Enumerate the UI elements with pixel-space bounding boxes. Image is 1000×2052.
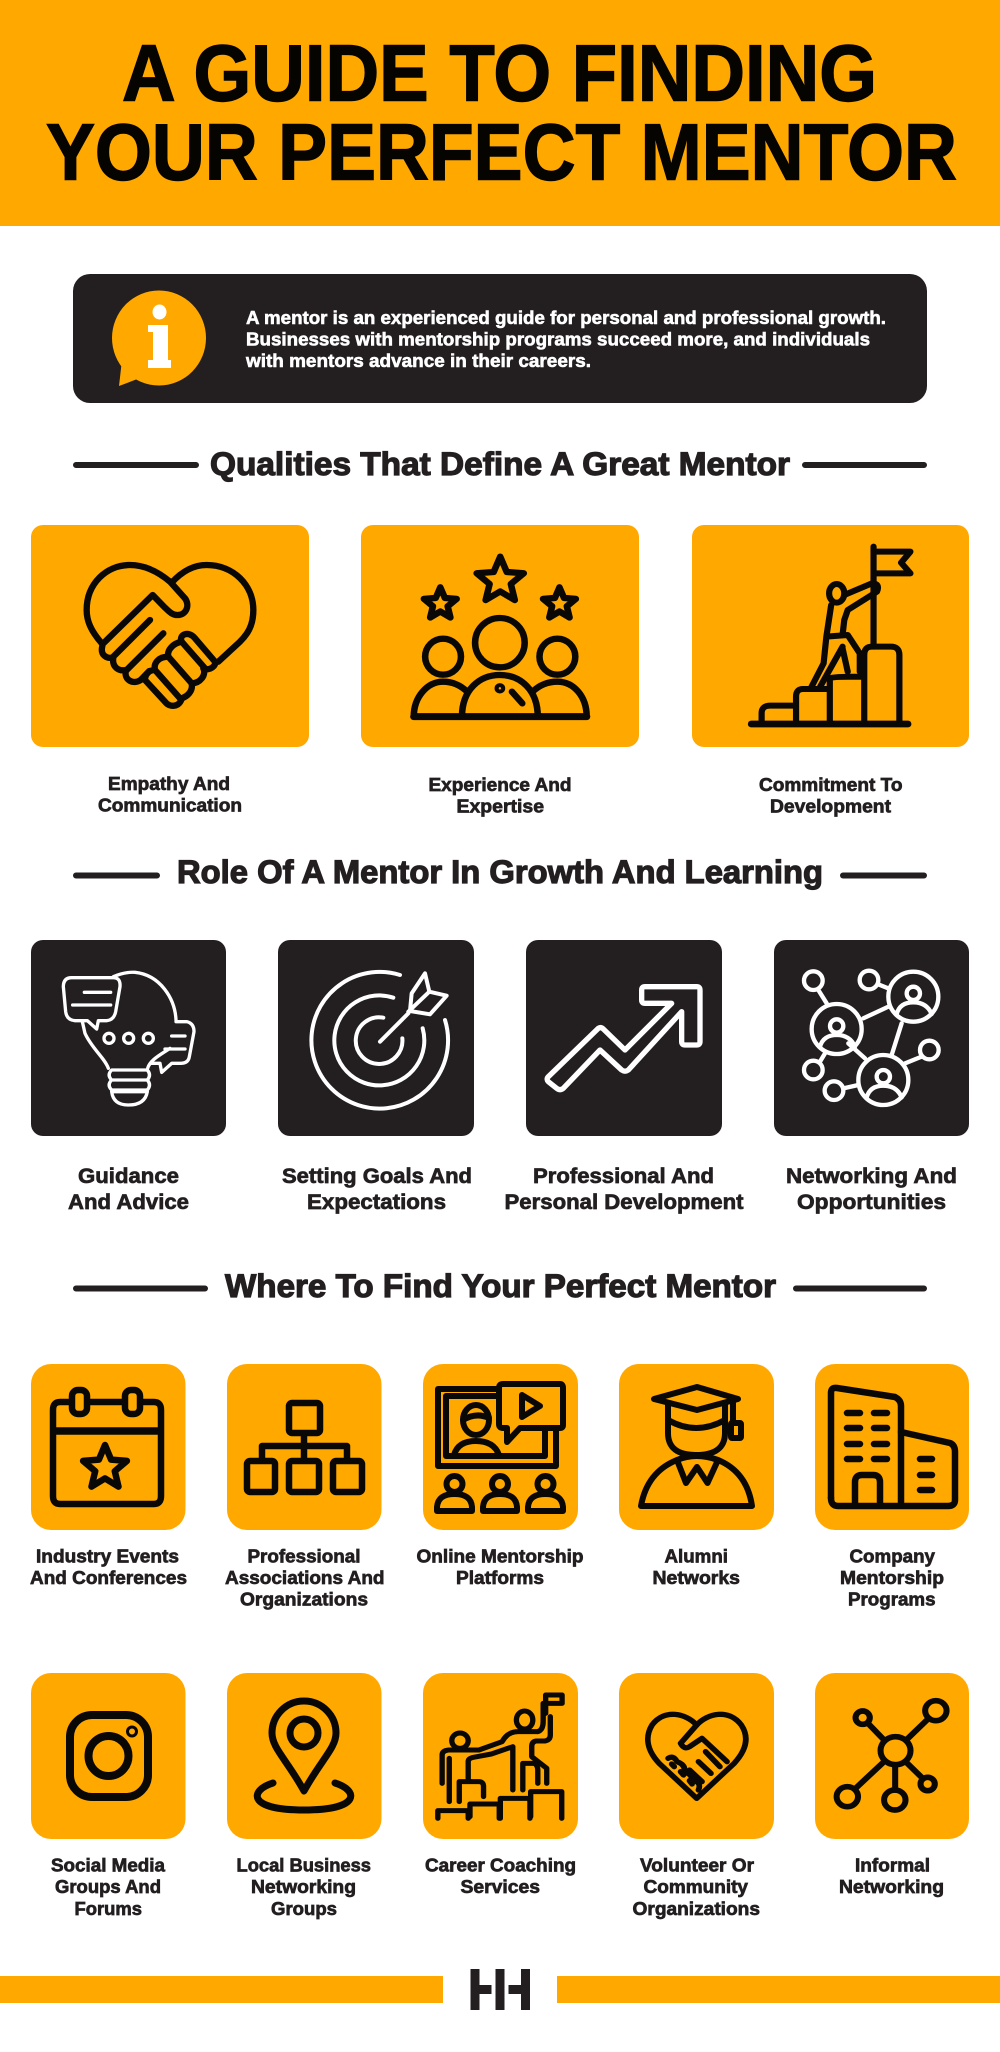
icon: info speech bubble [112,290,206,386]
label: Setting Goals And [282,1164,472,1188]
label: Services [460,1876,540,1897]
label [632,1854,760,1919]
label: Professional [248,1546,360,1566]
icon: person climbing steps with flag [751,547,910,724]
panel: social media groups [31,1673,186,1919]
panel: networking and opportunities [774,940,969,1214]
label: Development [770,796,891,816]
label [416,1546,584,1588]
label: Alumni [664,1546,728,1566]
panel: volunteer or community organizations [619,1673,774,1919]
label: Empathy And [108,773,230,794]
panel: industry events [30,1364,187,1588]
label: Local Business [236,1854,371,1876]
icon: rising arrow [547,987,700,1090]
label: Organizations [632,1898,760,1919]
label: Informal [855,1854,930,1876]
label [786,1164,957,1214]
label: Guidance [78,1164,179,1188]
icon: organisation chart [247,1403,362,1492]
label: Groups [271,1898,337,1919]
icon: camera social logo [70,1715,148,1797]
panel: professional associations [225,1364,384,1610]
label: Expertise [456,796,544,816]
label: And Conferences [30,1567,187,1588]
icon: video presentation [437,1384,563,1511]
icon: light bulb with speech bubbles [63,972,194,1105]
label: Associations And [225,1567,384,1588]
icon: graduate [641,1387,752,1506]
label: Networking And [786,1164,957,1188]
heading: role of a mentor: Role Of A Mentor In Growth And Learning [177,854,823,890]
panel: intro callout [73,274,927,403]
label [225,1546,384,1610]
label: Professional And [533,1164,714,1188]
label [652,1546,740,1588]
label: Organizations [240,1588,368,1610]
label: Networking [251,1876,356,1897]
label: Social Media [51,1854,166,1876]
label: Networking [839,1876,944,1897]
panel: informal networking [815,1673,969,1897]
panel: online mentorship platforms [416,1364,584,1588]
icon: people with stars [414,557,587,717]
label: Groups And [55,1876,161,1897]
label: Platforms [456,1567,544,1588]
icon: people network [804,971,939,1105]
intro text: A mentor is an experienced guide for personal and professional growth. [246,307,886,328]
label [425,1854,576,1897]
label [839,1854,944,1897]
panel: empathy and communication [31,525,309,816]
intro text [245,307,886,371]
label: Mentorship [840,1567,944,1588]
icon: heart handshake [87,565,253,706]
label [428,774,572,816]
icon: calendar with star [53,1390,161,1504]
label: Industry Events [36,1546,179,1566]
label [51,1854,166,1919]
label: Volunteer Or [640,1854,754,1876]
label: Commitment To [759,774,902,795]
label [30,1546,187,1588]
label: And Advice [68,1190,189,1214]
panel: professional and personal development [504,940,744,1214]
label: Experience And [428,774,572,795]
label: Opportunities [797,1190,946,1214]
label [98,773,242,816]
label: Online Mentorship [416,1546,584,1566]
panel: local business groups [227,1673,382,1919]
label: Company [850,1546,936,1566]
icon: target with arrow [311,972,448,1109]
heading: qualities: Qualities That Define A Great Mentor [210,446,790,482]
panel: career coaching [423,1673,578,1897]
label [282,1164,472,1214]
intro text: with mentors advance in their careers. [245,350,591,371]
panel: commitment to development [692,525,969,816]
label [840,1546,944,1610]
label: Expectations [307,1190,446,1214]
label: Community [644,1876,749,1897]
label: Communication [98,794,242,816]
icon: coach helping climber [438,1695,562,1818]
panel: guidance and advice [31,940,226,1214]
icon: office buildings [831,1388,955,1506]
label: Forums [74,1898,142,1919]
header banner [0,0,1000,226]
logo [470,1969,530,2010]
panel: alumni networks [619,1364,774,1588]
heading: where to find: Where To Find Your Perfect Mentor [225,1268,776,1304]
label [68,1164,189,1214]
footer bars [0,1976,1000,2003]
label: Programs [848,1588,936,1610]
title: A GUIDE TO FINDING [122,28,877,118]
panel: setting goals and expectations [278,940,474,1214]
label: Career Coaching [425,1854,576,1876]
label [759,774,902,816]
label: Networks [652,1567,740,1588]
panel: experience and expertise [361,525,639,816]
title [46,28,957,196]
icon: hub and nodes [837,1701,947,1810]
icon: location pin [257,1701,351,1810]
icon: heart handshake small [648,1714,746,1798]
label [236,1854,371,1919]
label: Personal Development [504,1190,744,1214]
intro text: Businesses with mentorship programs succeed more, and individuals [246,328,870,350]
label [504,1164,744,1214]
panel: company mentorship programs [815,1364,969,1610]
